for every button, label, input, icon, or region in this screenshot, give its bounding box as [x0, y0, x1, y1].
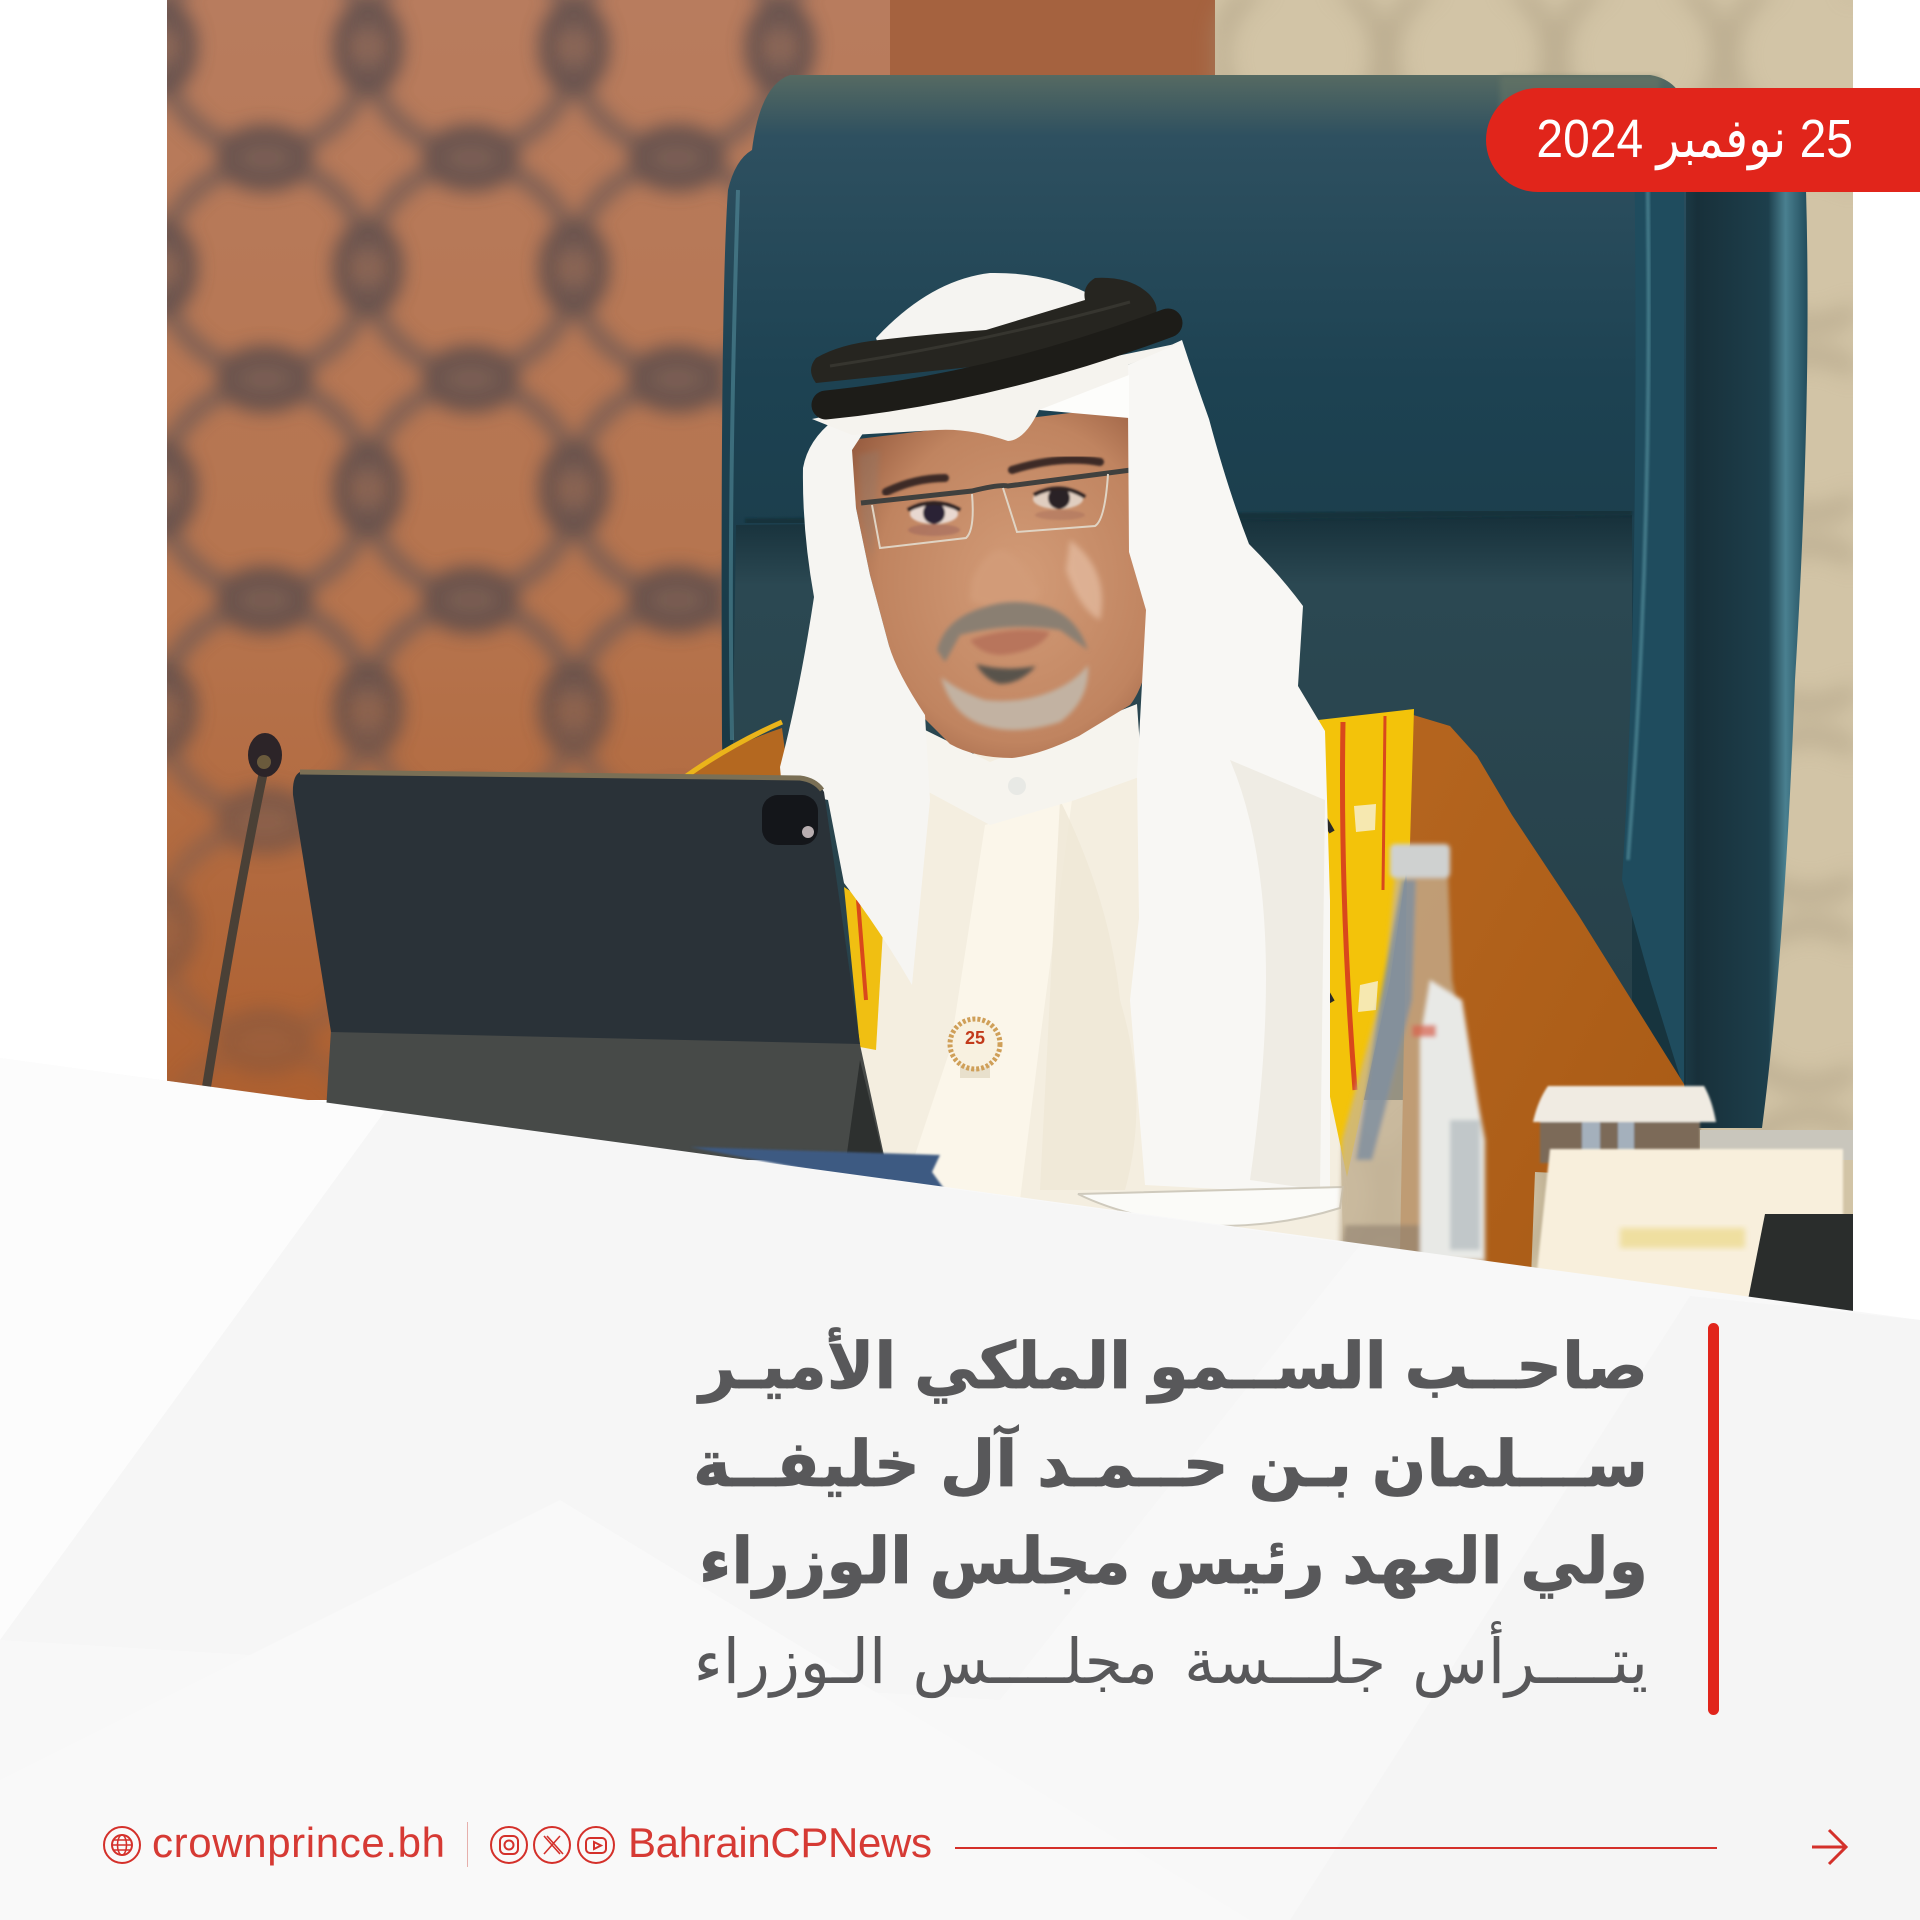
accent bar	[1708, 1323, 1719, 1715]
water bottle	[1338, 844, 1486, 1265]
date badge	[1486, 88, 1920, 192]
collar	[919, 704, 1142, 825]
heading line 4: يتــــرأس جلـــسة مجلــــس الـوزراء	[694, 1621, 1648, 1698]
face	[850, 405, 1155, 758]
glasses	[861, 470, 1131, 548]
eyes	[908, 487, 1085, 536]
ghutra: white head cloth	[780, 273, 1330, 1195]
heading text	[693, 1327, 1648, 1698]
microphone	[206, 733, 282, 1090]
badge: 25 years pin	[950, 1019, 1000, 1078]
date badge: 25 نوفمبر 2024	[1536, 108, 1853, 171]
collar button	[1008, 777, 1026, 795]
icon: X	[534, 1827, 570, 1863]
moustache and beard	[937, 602, 1088, 730]
arrow	[1812, 1830, 1846, 1864]
social handle: BahrainCPNews	[628, 1819, 932, 1866]
divider	[467, 1822, 468, 1867]
icon: youtube	[578, 1827, 614, 1863]
badge: 25 years pin: 25	[965, 1028, 985, 1048]
heading line 2: ســـلمان بـن حــمـد آل خليفــة	[693, 1424, 1648, 1502]
heading line 1: صاحــب الســمو الملكي الأميـر	[696, 1327, 1648, 1404]
bottom panel	[0, 1058, 1920, 1920]
robe: brown bisht	[685, 714, 1700, 1305]
website: crownprince.bh	[152, 1819, 445, 1866]
name card	[1536, 1130, 1853, 1311]
chair	[722, 75, 1808, 1128]
plate	[1078, 1187, 1343, 1226]
thobe: white garment	[860, 754, 1343, 1241]
photo: Crown Prince at cabinet session	[150, 0, 1855, 1340]
icon: instagram	[491, 1827, 527, 1863]
coffee cup	[1533, 1086, 1716, 1163]
icon: globe	[104, 1827, 140, 1863]
eyebrows	[886, 460, 1100, 492]
agal: black head cord	[811, 278, 1168, 405]
heading line 3: ولي العهد رئيس مجلس الوزراء	[699, 1526, 1648, 1599]
footer rule	[955, 1847, 1717, 1849]
yellow embroidered band	[844, 709, 1414, 1177]
footer	[104, 1819, 1846, 1867]
tablet	[293, 772, 945, 1190]
wall: patterned wood	[150, 0, 1855, 1320]
